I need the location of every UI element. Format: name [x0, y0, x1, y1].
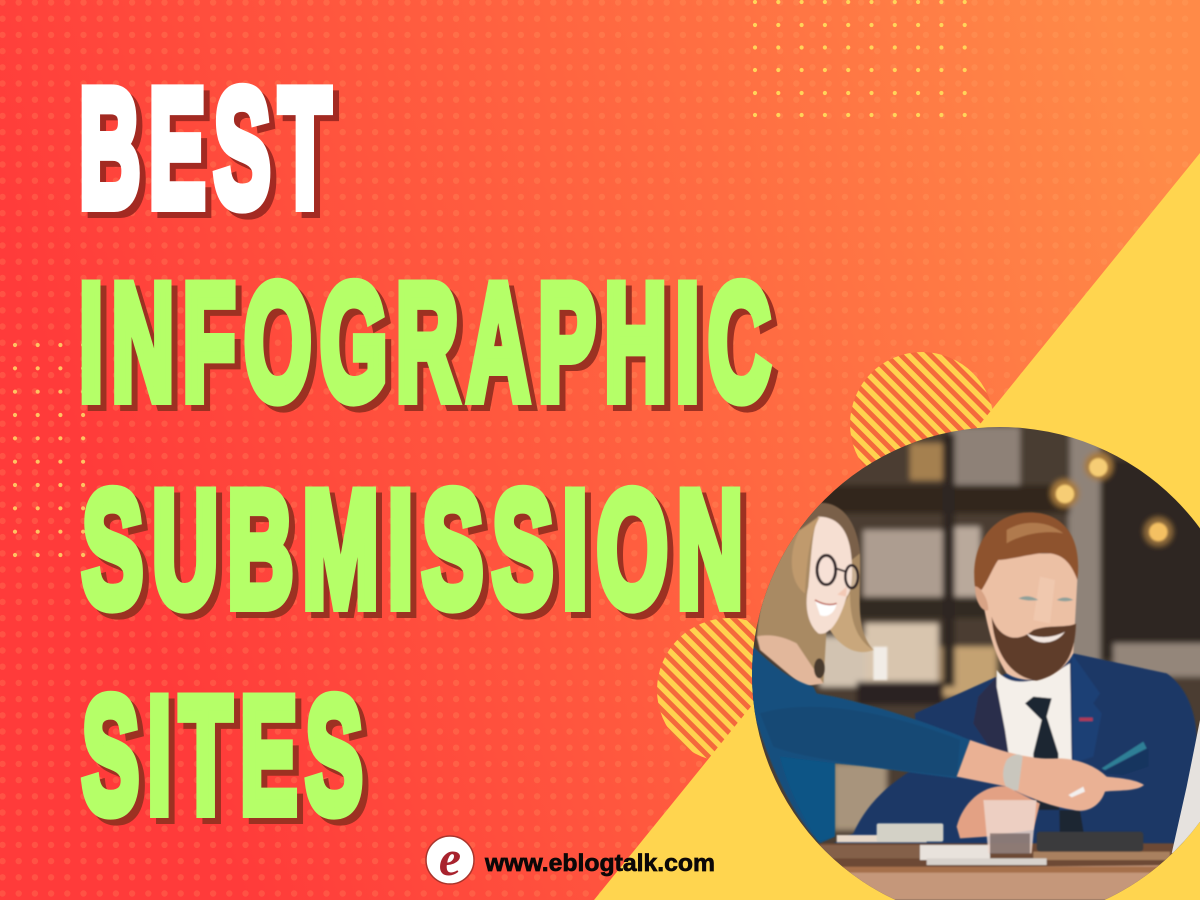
woman: [757, 503, 873, 687]
laptop: [1172, 720, 1200, 853]
dot grid: top right: [755, 2, 966, 115]
pointing hand and watch: [957, 740, 1144, 838]
heading: SUBMISSION: [82, 457, 758, 647]
cafe background: [752, 427, 1200, 900]
yellow diagonal shape: [594, 153, 1200, 900]
striped circle: lower: [657, 618, 801, 762]
table and objects: [807, 823, 1200, 900]
woman's blue jacket and arm: [747, 647, 970, 843]
dot grid: left: [15, 345, 85, 555]
striped circle: upper: [850, 352, 994, 496]
photo: two colleagues in a cafe: [752, 427, 1200, 900]
water glass: [983, 800, 1037, 854]
heading: SITES: SITES: [82, 663, 371, 847]
cafe lights: [873, 458, 1168, 680]
heading: BEST: [79, 54, 345, 248]
heading: BEST: BEST: [79, 54, 339, 242]
heading: INFOGRAPHIC: [79, 250, 785, 440]
logo badge: e: [439, 830, 461, 886]
man: head: [974, 512, 1078, 681]
heading: SITES: SITES: [88, 669, 377, 853]
heading: BEST: BEST: [85, 60, 345, 248]
website url: www.eblogtalk.com: [484, 850, 715, 877]
heading: SITES: [82, 663, 377, 853]
logo badge: [426, 830, 474, 886]
man: suit and shirt: [833, 653, 1197, 850]
